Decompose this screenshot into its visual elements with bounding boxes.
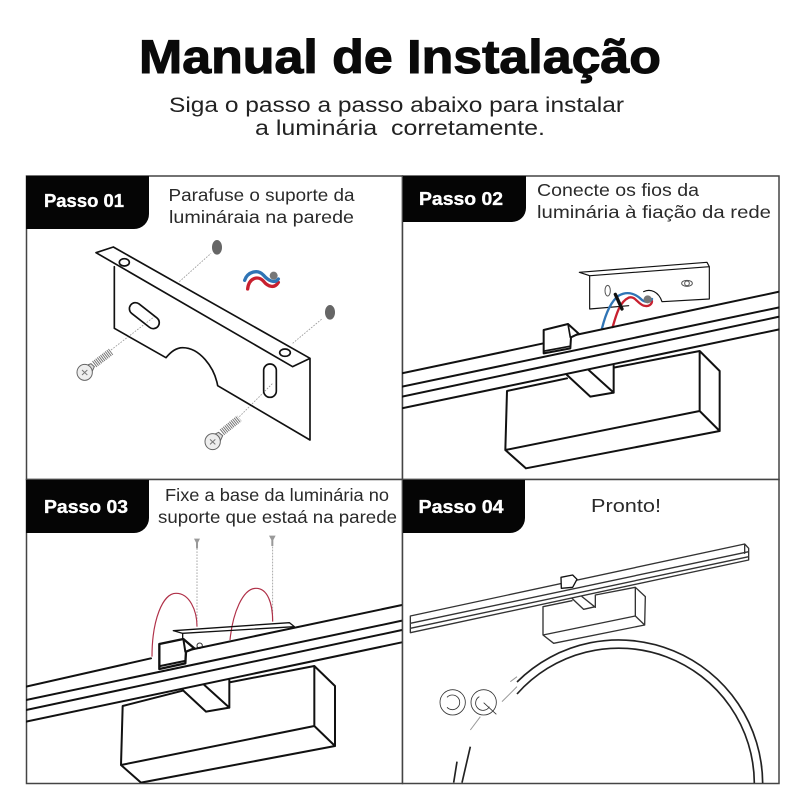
text: passo 04 instruction: Pronto! — [591, 495, 661, 516]
badge: passo 03 — [26, 480, 149, 533]
icon: grey nuts — [212, 240, 335, 320]
panel: passo 01 — [26, 176, 402, 480]
badge: passo 02: Passo 02 — [419, 188, 503, 209]
subtitle: a luminária corretamente. — [255, 116, 545, 140]
mirror ring — [454, 640, 763, 783]
text: passo 03 instruction — [158, 485, 397, 527]
illustration: wall bracket with screws — [77, 240, 335, 450]
panel: passo 04 — [402, 480, 779, 784]
subtitle: Siga o passo a passo abaixo para instalar — [169, 93, 624, 117]
text: passo 02 instruction: Conecte os fios da — [537, 180, 699, 200]
badge: passo 03: Passo 03 — [44, 496, 128, 517]
icon: screws — [194, 536, 276, 548]
badge: passo 01: Passo 01 — [44, 190, 124, 211]
text: passo 01 instruction: lumináraia na parede — [169, 207, 354, 227]
subtitle — [169, 93, 624, 140]
text: passo 01 instruction: Parafuse o suporte da — [168, 185, 355, 205]
title: Manual de Instalação — [139, 30, 661, 83]
text: passo 02 instruction: luminária à fiação da rede — [537, 202, 771, 222]
icon: wires — [602, 293, 652, 328]
text: passo 03 instruction: Fixe a base da luminária no — [165, 485, 389, 505]
text: passo 03 instruction: suporte que estaá na parede — [158, 507, 397, 527]
illustration: wiring and lamp — [402, 262, 779, 468]
icon: mirror touch buttons — [440, 690, 496, 715]
text: passo 02 instruction — [537, 180, 771, 222]
icon: screw left — [77, 352, 111, 380]
panel: passo 02 — [402, 176, 779, 480]
text: passo 01 instruction — [168, 185, 355, 227]
badge: passo 04 — [403, 480, 525, 533]
clip — [544, 324, 579, 353]
panel: passo 03 — [26, 480, 402, 784]
badge: passo 02 — [403, 176, 526, 222]
illustration: finished lamp and mirror — [410, 544, 763, 783]
rail — [402, 292, 779, 408]
lamp — [505, 351, 720, 468]
icon: wires — [245, 272, 278, 289]
icon: screw right — [205, 418, 239, 450]
badge: passo 04: Passo 04 — [418, 496, 504, 517]
badge: passo 01 — [26, 176, 149, 229]
arrows: red arcs — [152, 588, 273, 657]
illustration: fixing lamp base — [26, 536, 402, 783]
